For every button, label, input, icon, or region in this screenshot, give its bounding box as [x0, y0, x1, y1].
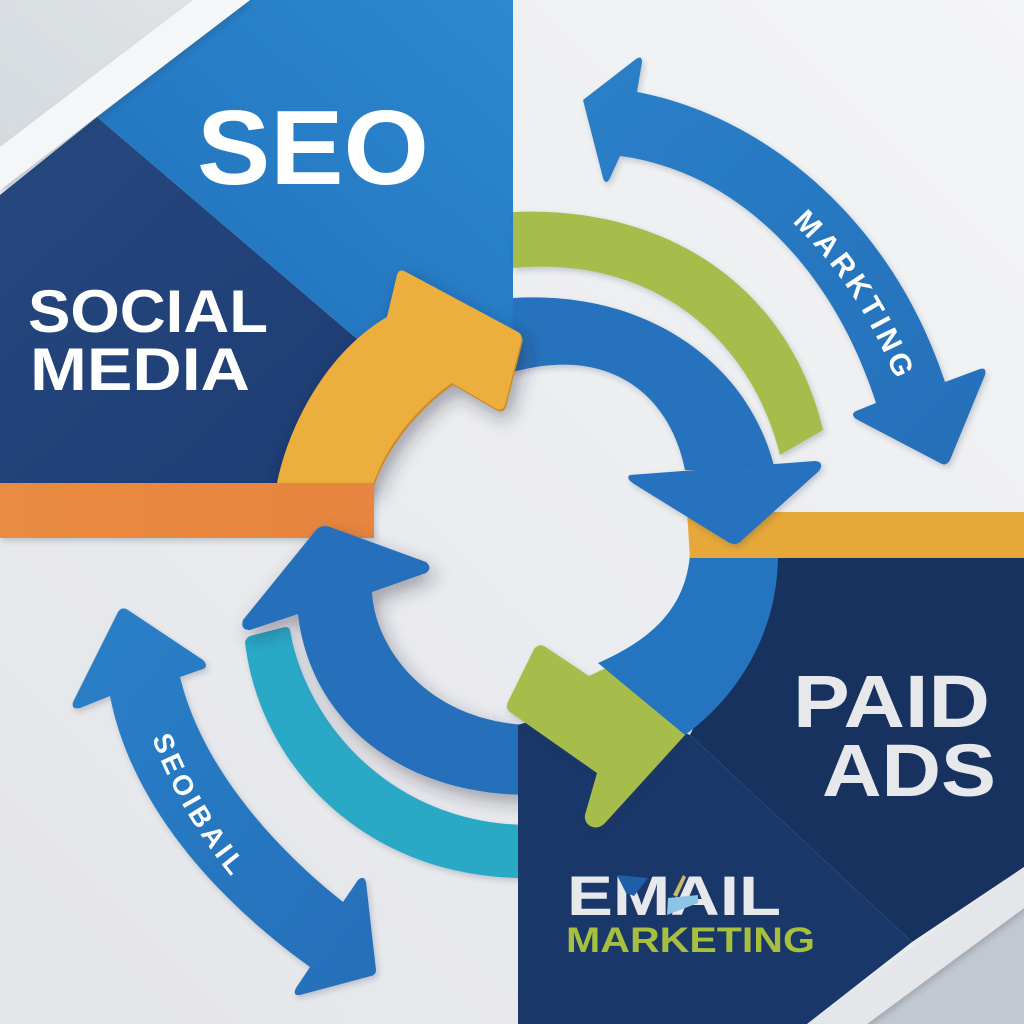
arc: blue lower ring [598, 555, 778, 735]
heading: social media: SOCIAL [28, 278, 268, 345]
heading: social media: MEDIA [30, 336, 250, 403]
heading: paid ads: PAID [793, 660, 990, 743]
arc: teal [245, 627, 530, 878]
icon: email letter accents [617, 875, 698, 915]
bar: orange left [0, 483, 374, 538]
panel: email marketing [518, 700, 912, 1024]
arrow: green [507, 645, 690, 827]
corner strip: top left [0, 0, 250, 190]
bar: yellow right [687, 512, 1024, 558]
panel: social media [0, 117, 397, 483]
double arrow: marketing [583, 58, 985, 464]
double arrow: social [73, 608, 376, 995]
heading: email marketing: EMAIL [567, 864, 781, 927]
arrow label: marketing: MARKTING [794, 209, 912, 376]
heading: paid ads [793, 660, 996, 812]
panel: paid ads [690, 558, 1024, 942]
heading: email marketing [566, 864, 815, 960]
heading: social media [28, 278, 268, 403]
panel: SEO [97, 0, 513, 373]
arc: blue upper ring [513, 297, 775, 470]
arrow: yellow [277, 271, 523, 490]
heading: paid ads: ADS [822, 729, 996, 812]
heading: email marketing: MARKETING [566, 921, 815, 960]
arrow label: social: SEOIBAIL [154, 734, 240, 876]
arc: green [513, 212, 823, 455]
arrow: blue lower left [242, 526, 530, 795]
corner strip: bottom right [807, 867, 1024, 1024]
arrowhead: blue ring [628, 461, 821, 544]
heading: SEO: SEO [197, 89, 429, 207]
